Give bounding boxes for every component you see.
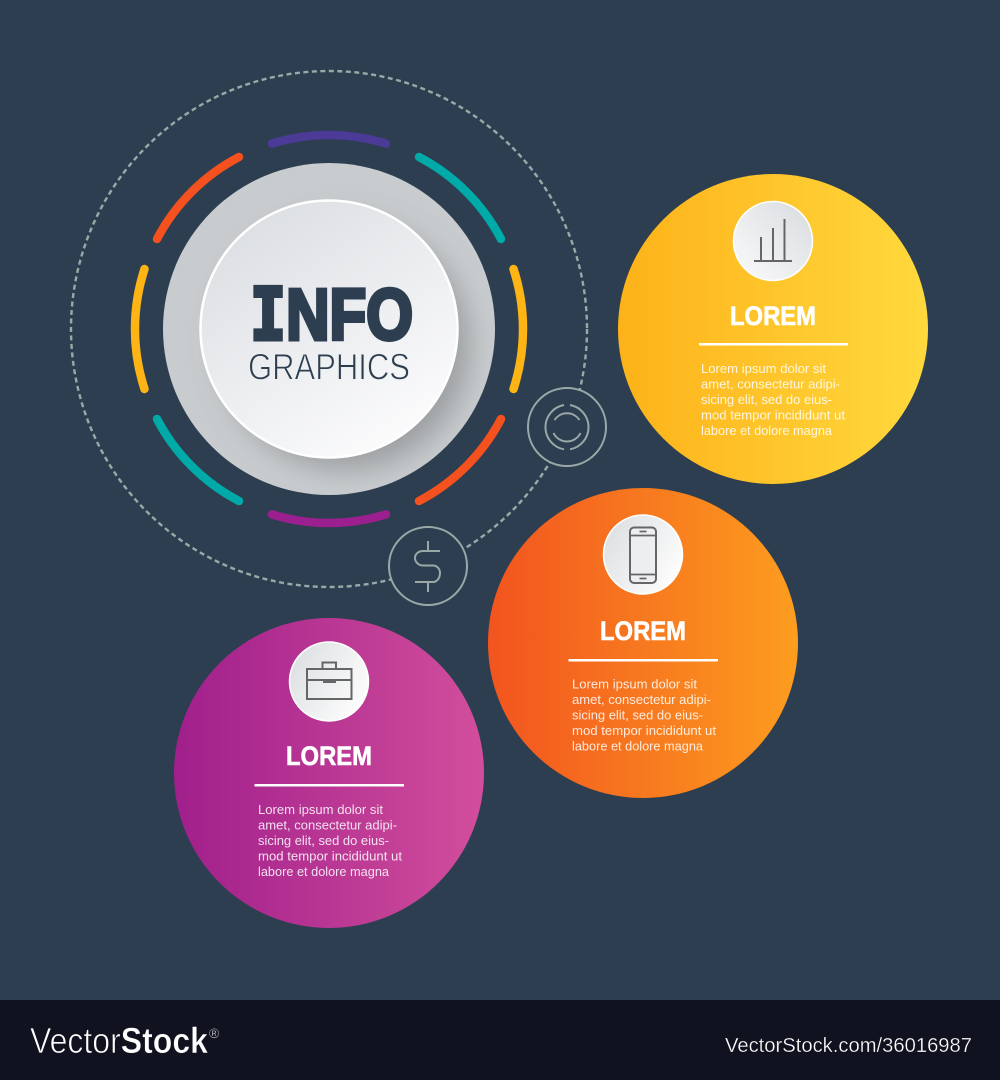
body text: sicing elit, sed do eius- (572, 708, 703, 722)
body text: sicing elit, sed do eius- (701, 393, 832, 407)
magenta circle (174, 618, 484, 928)
subtitle: GRAPHICS (248, 346, 410, 388)
registered mark: ® (209, 1025, 220, 1041)
body text (701, 362, 846, 438)
icon: briefcase (290, 642, 368, 721)
body text: Lorem ipsum dolor sit (258, 803, 384, 817)
body text: mod tempor incididunt ut (572, 724, 717, 738)
rule (699, 343, 848, 346)
body text: amet, consectetur adipi- (701, 378, 840, 392)
footer url: VectorStock.com/36016987 (725, 1035, 972, 1057)
coloured arc ring (135, 135, 523, 523)
body text: labore et dolore magna (572, 740, 703, 754)
yellow circle (618, 174, 928, 484)
footer logo: VectorStock (30, 1020, 209, 1061)
heading: LOREM (600, 616, 686, 646)
rule (568, 659, 718, 662)
disc shadow (220, 220, 470, 470)
central badge (163, 163, 495, 495)
footer bar (0, 1000, 1000, 1080)
body text (258, 803, 403, 879)
body text: sicing elit, sed do eius- (258, 834, 389, 848)
white inner disc (200, 200, 458, 458)
heading: LOREM (730, 301, 816, 331)
panel: yellow (618, 174, 928, 484)
icon: bar chart (734, 202, 812, 280)
body text: mod tempor incididunt ut (701, 408, 846, 422)
node: target icon (528, 388, 606, 466)
title: INFO (250, 272, 413, 356)
node: dollar icon (389, 527, 467, 605)
body text (572, 678, 717, 754)
panel: orange (488, 488, 798, 798)
grey outer disc (163, 163, 495, 495)
icon: smartphone (604, 515, 682, 594)
body text: amet, consectetur adipi- (258, 818, 397, 832)
body text: Lorem ipsum dolor sit (701, 362, 827, 376)
dashed orbit (71, 71, 587, 587)
rule (254, 784, 404, 786)
body text: amet, consectetur adipi- (572, 693, 711, 707)
body text: mod tempor incididunt ut (258, 850, 403, 864)
panel: magenta (174, 618, 484, 928)
heading: LOREM (286, 741, 372, 771)
orange circle (488, 488, 798, 798)
body text: labore et dolore magna (701, 424, 832, 438)
body text: labore et dolore magna (258, 865, 389, 879)
body text: Lorem ipsum dolor sit (572, 678, 698, 692)
